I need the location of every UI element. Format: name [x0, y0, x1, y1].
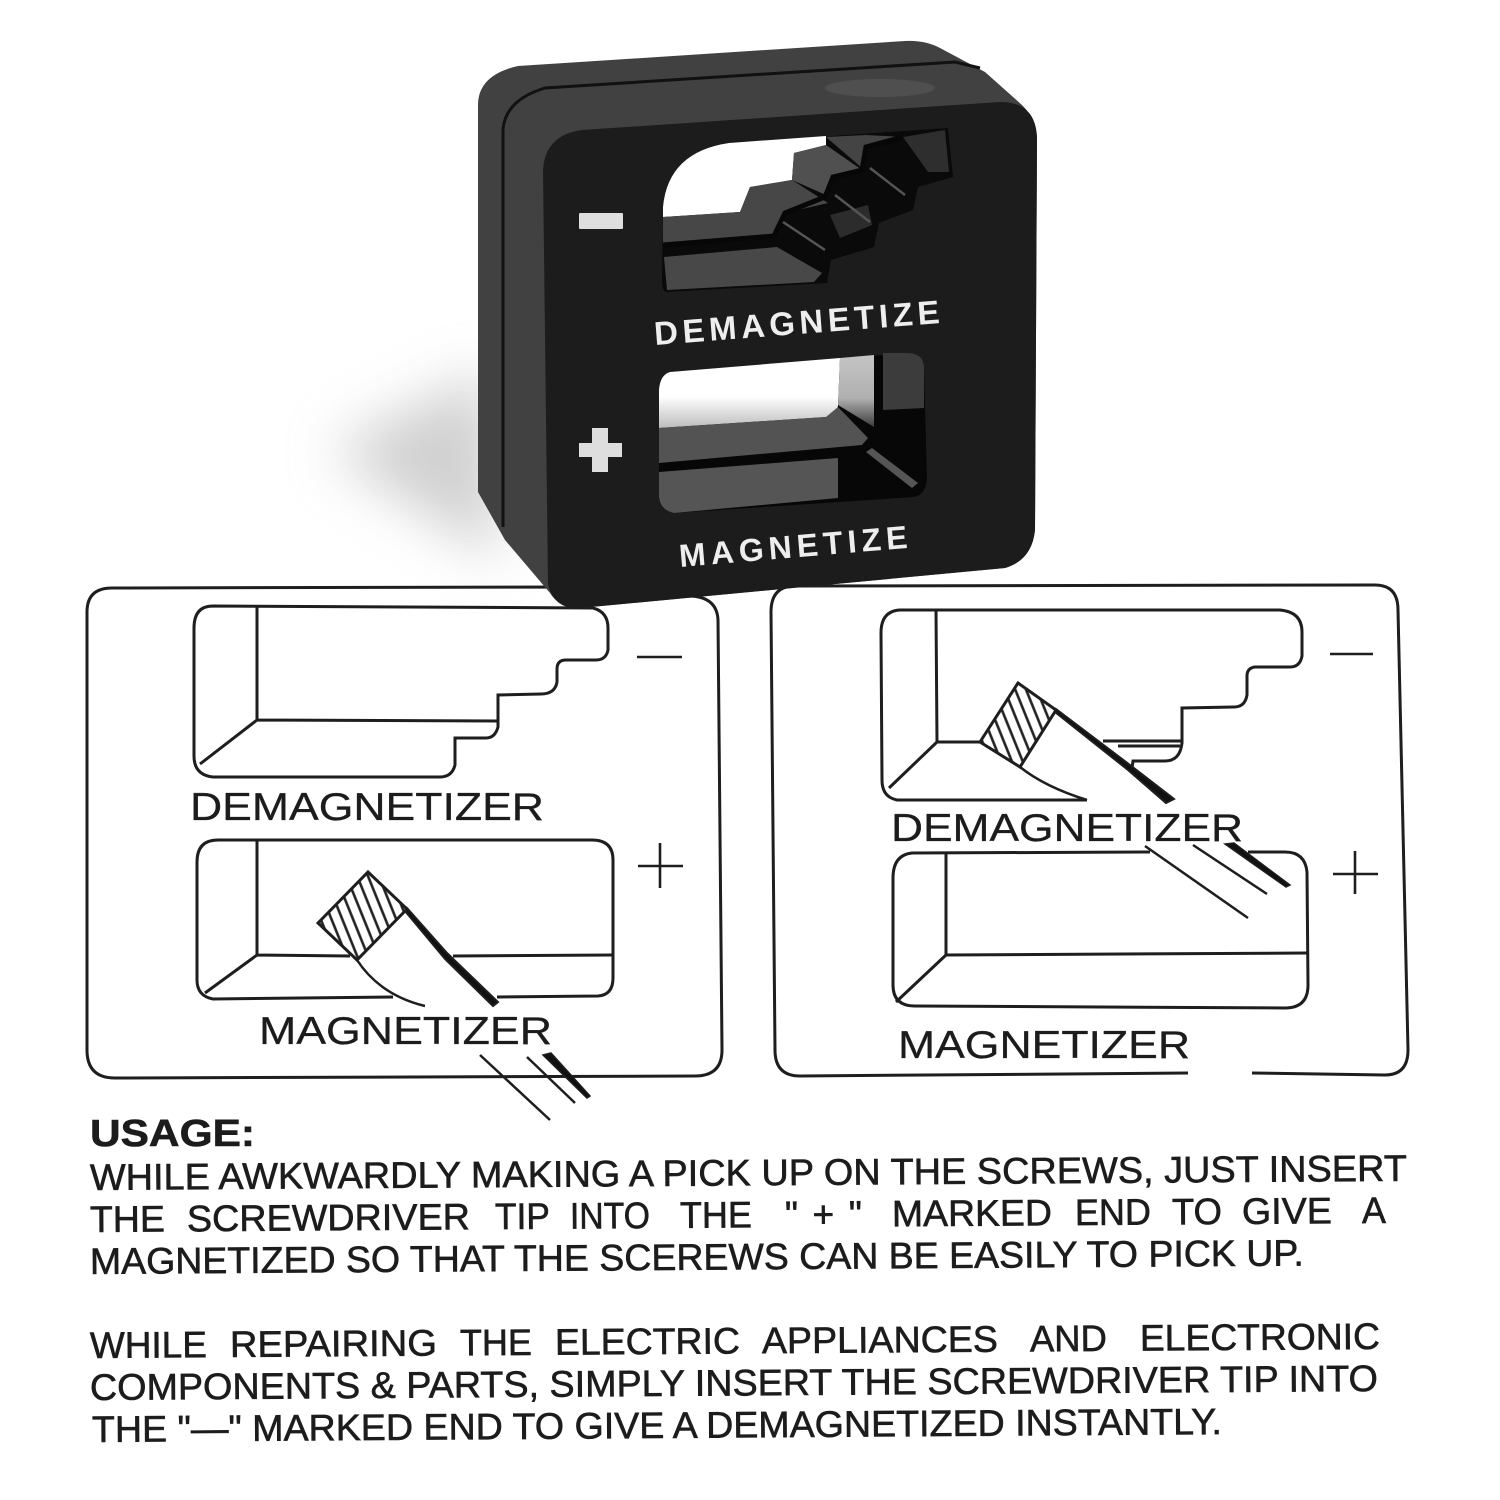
- minus symbol: [579, 213, 623, 229]
- demagnetize opening: [662, 128, 953, 292]
- block front face: [543, 102, 1037, 608]
- magnetizer slot left: [197, 840, 613, 999]
- usage text block 1: "+": [785, 1194, 862, 1235]
- screwdriver right: [980, 683, 1290, 918]
- usage text block 1: TIP: [495, 1196, 550, 1237]
- usage heading: USAGE:: [90, 1113, 255, 1155]
- screwdriver left: [318, 872, 590, 1120]
- label: DEMAGNETIZER left: DEMAGNETIZER: [190, 786, 544, 829]
- usage text block 1: END: [1075, 1192, 1151, 1233]
- usage text block 2: AND: [1030, 1318, 1107, 1359]
- usage text block 2: THE: [460, 1322, 532, 1363]
- usage text block 2: [90, 1316, 1380, 1450]
- usage text block 1: MARKED: [892, 1192, 1052, 1234]
- magnetizer slot right: [893, 852, 1308, 1008]
- top highlight: [825, 79, 935, 97]
- product: magnetizer demagnetizer block: [330, 41, 1037, 608]
- MAGNETIZE label: MAGNETIZE: [678, 519, 909, 574]
- DEMAGNETIZE label: DEMAGNETIZE: [653, 293, 941, 352]
- usage text block 1: THE: [680, 1194, 752, 1236]
- plus symbol: [579, 428, 622, 472]
- label: MAGNETIZER right: MAGNETIZER: [898, 1024, 1190, 1067]
- usage text block 1: WHILE AWKWARDLY MAKING A PICK UP ON THE SCREWS, JUST INSERT: [90, 1148, 1407, 1198]
- usage text block 2: WHILE: [90, 1324, 207, 1366]
- usage text block 1: MAGNETIZED SO THAT THE SCEREWS CAN BE EASILY TO PICK UP.: [90, 1233, 1304, 1282]
- minus and plus symbols left: [637, 657, 683, 888]
- usage text block 2: THE "—" MARKED END TO GIVE A DEMAGNETIZED INSTANTLY.: [92, 1401, 1222, 1450]
- usage text block 2: REPAIRING: [230, 1323, 437, 1365]
- label: MAGNETIZER left: MAGNETIZER: [259, 1010, 552, 1053]
- usage text block 1: THE: [90, 1198, 165, 1240]
- usage text block 1: INTO: [570, 1195, 650, 1237]
- block body top and side: [478, 41, 1037, 608]
- panel: demagnetizing diagram: [771, 585, 1408, 1076]
- usage text block 1: A: [1362, 1190, 1386, 1231]
- product shadow: [330, 370, 500, 560]
- usage text block 2: APPLIANCES: [762, 1319, 998, 1361]
- usage text block 2: ELECTRIC: [555, 1320, 740, 1363]
- panel frame left: [87, 587, 722, 1078]
- panel frame right: [771, 585, 1408, 1076]
- usage text block 1: SCREWDRIVER: [187, 1196, 470, 1239]
- usage text block 1: [90, 1148, 1407, 1282]
- usage text block 2: COMPONENTS & PARTS, SIMPLY INSERT THE SCREWDRIVER TIP INTO: [90, 1358, 1378, 1408]
- usage text block 1: TO: [1172, 1191, 1222, 1232]
- block seam: [503, 62, 980, 527]
- demagnetizer slot left: [194, 606, 608, 777]
- magnetize opening: [659, 353, 927, 513]
- minus and plus symbols right: [1330, 654, 1378, 894]
- usage text block 2: ELECTRONIC: [1140, 1316, 1380, 1359]
- label: DEMAGNETIZER right: DEMAGNETIZER: [891, 807, 1243, 850]
- demagnetizer slot right: [881, 610, 1302, 800]
- usage text block 1: GIVE: [1242, 1190, 1332, 1232]
- panel: magnetizing diagram: [87, 587, 722, 1120]
